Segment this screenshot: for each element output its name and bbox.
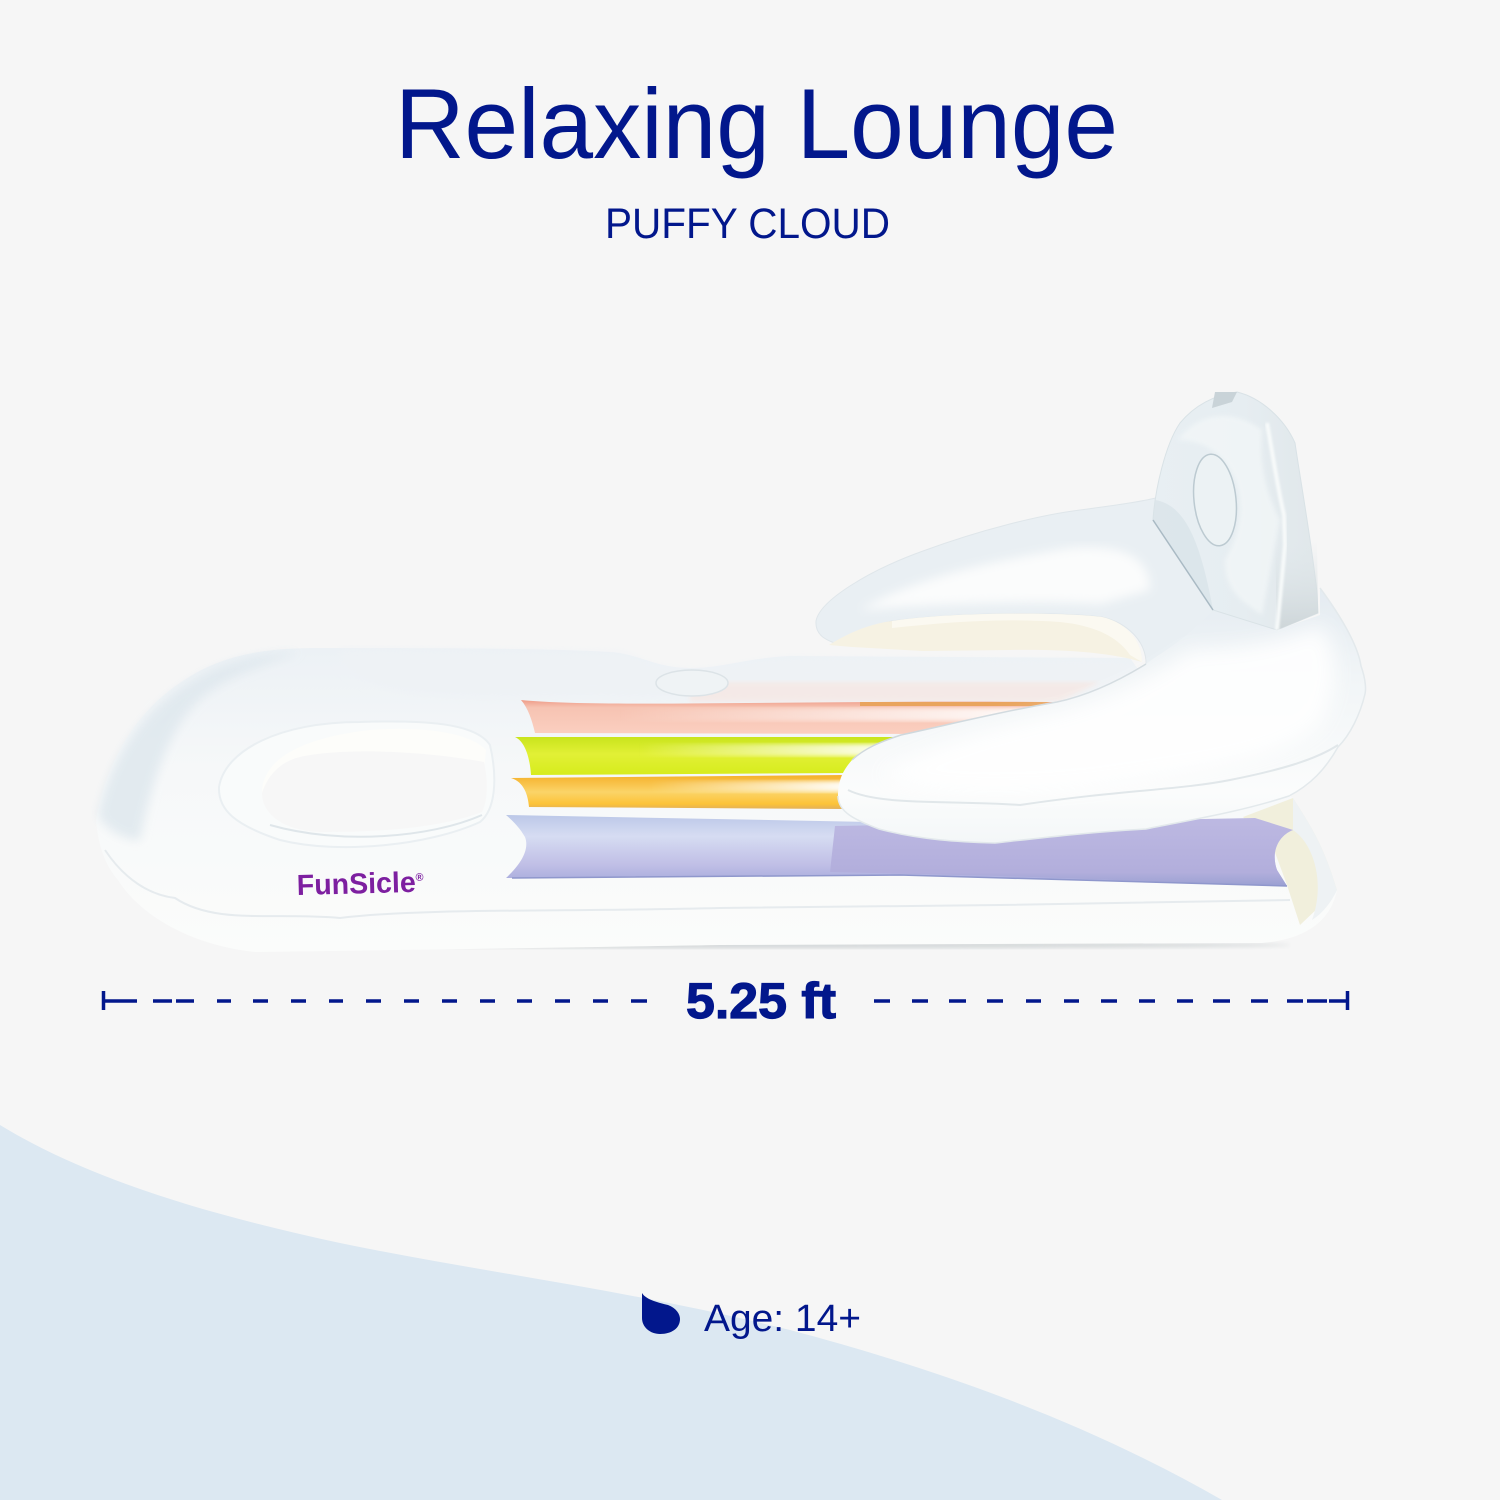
background wave — [0, 1125, 1222, 1500]
stripe: lavender — [506, 815, 1293, 886]
dimension value: 5.25 ft — [686, 973, 836, 1029]
stripe: orange — [511, 775, 845, 809]
left dashes — [104, 991, 647, 1010]
rainbow stripes — [506, 700, 1293, 886]
Funsicle logo: FunSicle — [296, 867, 418, 902]
age text: Age: 14+ — [704, 1298, 861, 1340]
lower arm — [838, 588, 1366, 843]
dimension line — [104, 973, 1348, 1029]
stripe: lime — [515, 737, 905, 775]
rim shading — [98, 652, 300, 840]
headrest pillow — [1153, 392, 1318, 630]
right dashes — [874, 991, 1348, 1010]
float base with head ring — [96, 648, 1337, 952]
Funsicle logo: ® — [415, 872, 424, 884]
age note — [642, 1293, 861, 1340]
stripe: pink — [521, 700, 1060, 734]
title: Relaxing Lounge — [395, 68, 1118, 179]
icon: water drop — [642, 1293, 680, 1334]
upper arm — [816, 497, 1215, 668]
right cream flap — [1243, 798, 1337, 925]
hole in ring — [219, 721, 494, 847]
armrest and seat back — [816, 392, 1366, 843]
product: inflatable lounge float — [96, 392, 1366, 952]
dimple cup holder — [656, 670, 728, 696]
subtitle: PUFFY CLOUD — [605, 200, 890, 248]
cream opening — [829, 614, 1142, 662]
